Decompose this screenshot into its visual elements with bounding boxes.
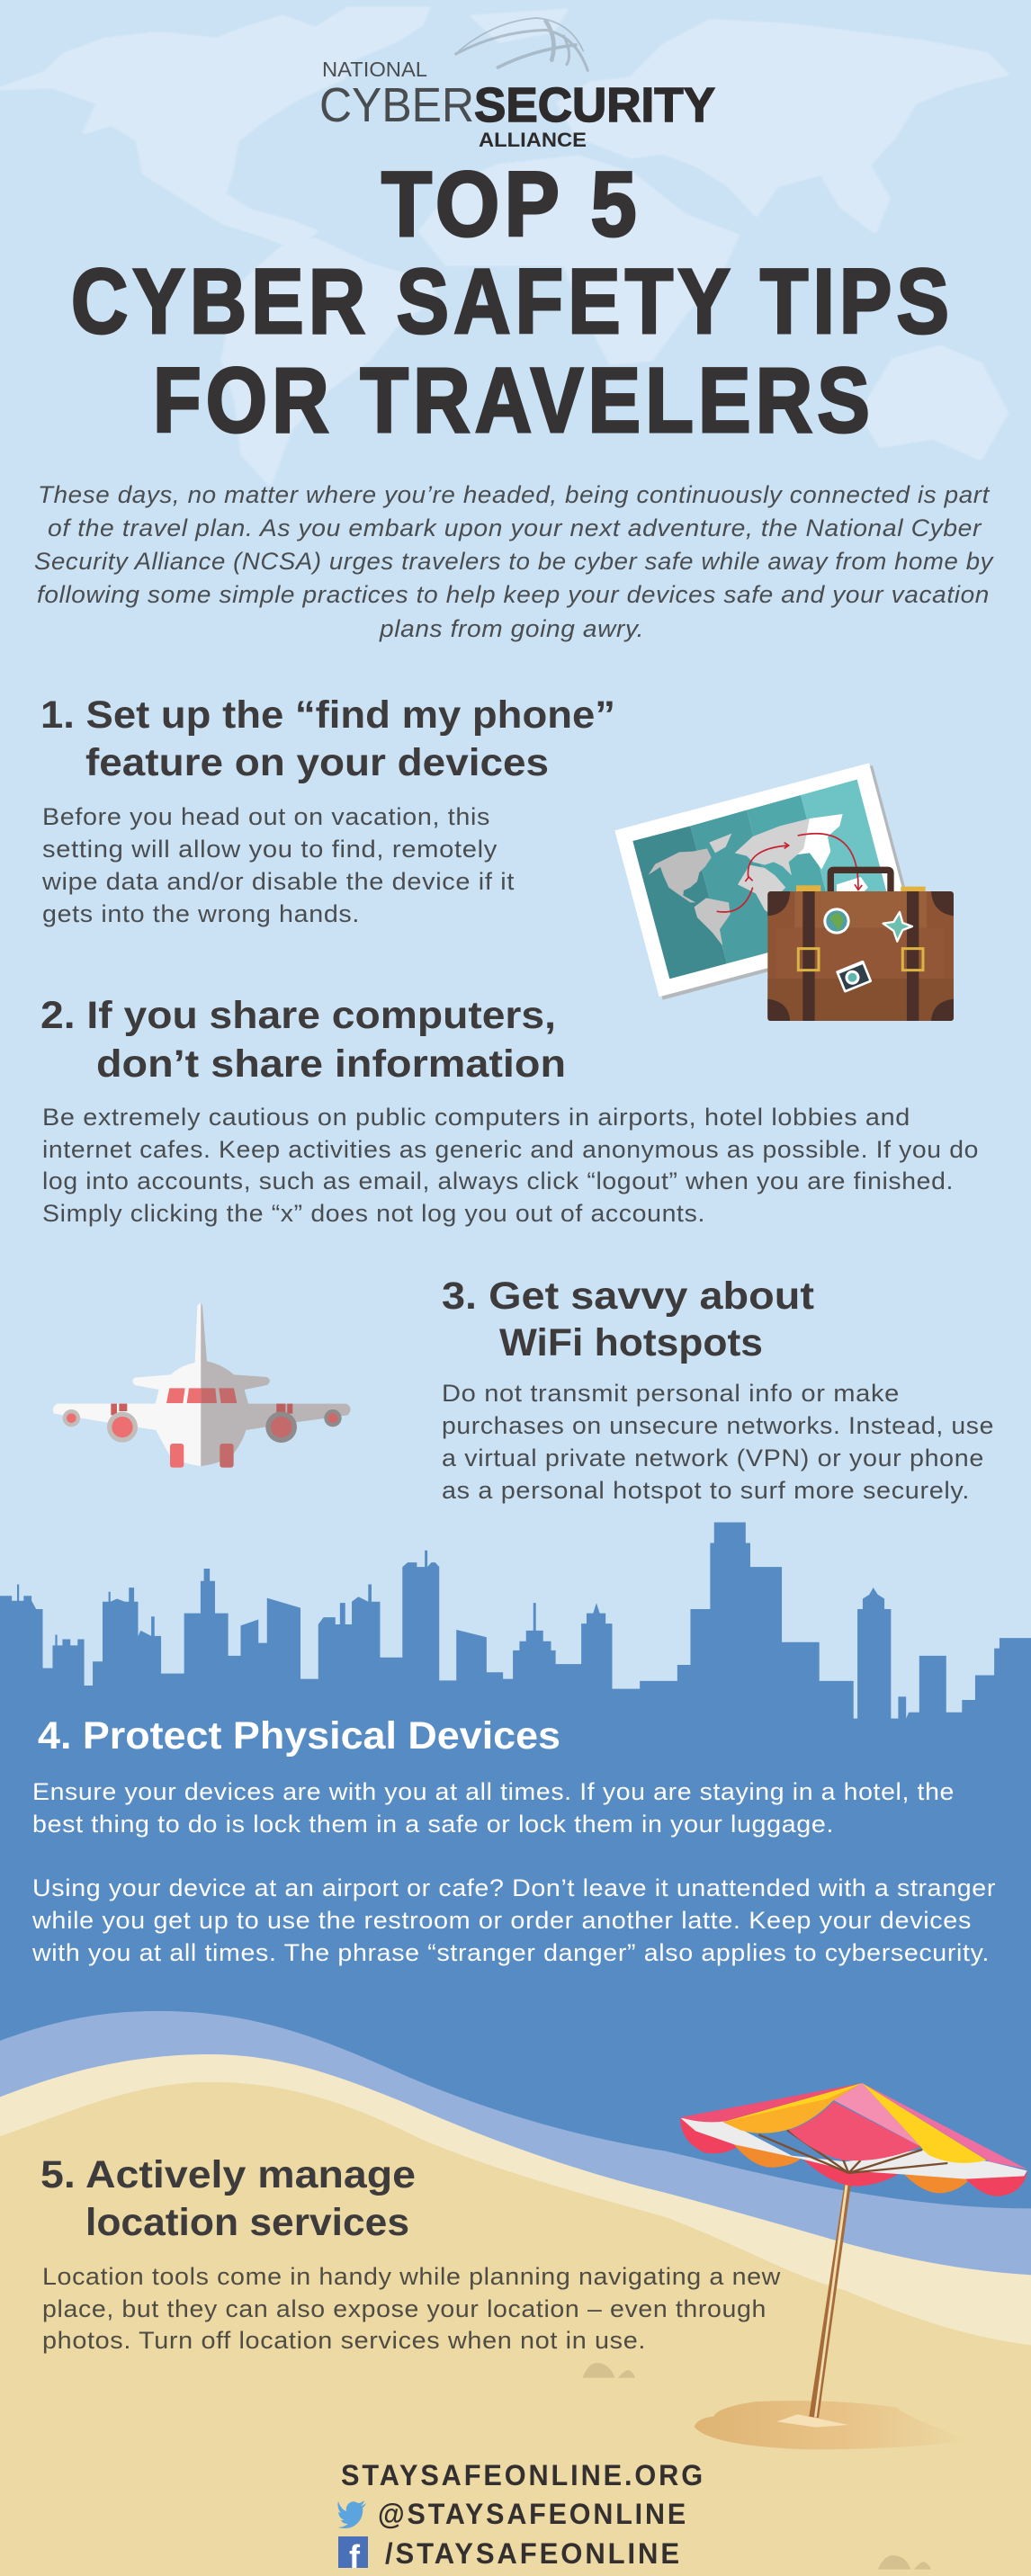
flight arrows (717, 834, 862, 912)
text: tip 2 (42, 1104, 979, 1227)
text: tip 4: Ensure your devices are with you at all times. If you are staying in a hotel, the (32, 1778, 955, 1805)
heading: tip 3: 3. Get savvy about (442, 1275, 814, 1318)
panel: tip 5 (40, 2153, 781, 2354)
logo: National Cyber Security Alliance: ALLIANCE (479, 129, 587, 151)
heading: tip 1: feature on your devices (85, 741, 549, 784)
canopy (680, 2083, 1027, 2196)
text: tip 4: while you get up to use the restroom or order another latte. Keep your devices (31, 1907, 972, 1934)
logo: National Cyber Security Alliance: SECURITY (474, 78, 715, 132)
heading: tip 1 (40, 693, 615, 784)
text: tip 2: Simply clicking the “x” does not log you out of accounts. (42, 1200, 705, 1227)
text: tip 3: purchases on unsecure networks. Instead, use (442, 1412, 994, 1439)
logo: National Cyber Security Alliance: CYBER (319, 78, 474, 132)
icon: beach umbrella (680, 2083, 1027, 2449)
text: tip 5: photos. Turn off location services when not in use. (42, 2327, 646, 2354)
intro paragraph: of the travel plan. As you embark upon your next adventure, the National Cyber (48, 514, 982, 541)
city skyline (0, 1523, 1031, 2375)
text: tip 1: wipe data and/or disable the device if it (41, 868, 515, 895)
text: tip 2: Be extremely cautious on public computers in airports, hotel lobbies and (42, 1104, 910, 1131)
panel: tip 1 (40, 693, 615, 927)
suitcase (767, 870, 954, 1021)
icon: facebook: f (349, 2538, 361, 2575)
text: tip 4: best thing to do is lock them in a safe or lock them in your luggage. (32, 1811, 834, 1838)
heading: tip 2: 2. If you share computers, (40, 994, 556, 1037)
text: tip 2: log into accounts, such as email, always click “logout” when you are finished. (42, 1167, 954, 1194)
text: tip 4: Using your device at an airport or cafe? Don’t leave it unattended with a stranger (32, 1874, 996, 1901)
icon: airplane (53, 1302, 351, 1468)
sand mound (695, 2401, 969, 2449)
title: TOP 5 (381, 153, 641, 255)
text: tip 3: Do not transmit personal info or make (442, 1380, 900, 1407)
title (71, 153, 954, 452)
text: tip 3: a virtual private network (VPN) or your phone (442, 1445, 984, 1471)
heading: tip 2 (40, 994, 566, 1086)
heading: tip 5 (40, 2153, 416, 2244)
text: tip 4 (31, 1778, 996, 1966)
sand rocks (583, 2363, 931, 2570)
heading: tip 3 (442, 1275, 814, 1364)
map (614, 763, 917, 1000)
text: tip 1: Before you head out on vacation, this (42, 803, 490, 830)
logo swoosh (456, 18, 587, 70)
text: tip 1 (41, 803, 515, 927)
footer links (337, 2459, 705, 2575)
text: tip 2: internet cafes. Keep activities as generic and anonymous as possible. If you do (42, 1136, 979, 1163)
pole (776, 2175, 852, 2428)
icon: facebook (338, 2536, 368, 2575)
intro paragraph: Security Alliance (NCSA) urges travelers to be cyber safe while away from home by (34, 548, 994, 575)
facebook handle: /STAYSAFEONLINE (385, 2537, 682, 2570)
text: tip 3 (442, 1380, 994, 1504)
logo: National Cyber Security Alliance: NATIONAL (322, 58, 427, 81)
website: STAYSAFEONLINE.ORG (341, 2459, 705, 2491)
heading: tip 2: don’t share information (96, 1042, 566, 1086)
heading: tip 3: WiFi hotspots (499, 1321, 763, 1364)
logo: National Cyber Security Alliance (319, 18, 715, 151)
panel: tip 4 (31, 1714, 996, 1966)
title: FOR TRAVELERS (153, 349, 874, 452)
text: tip 1: gets into the wrong hands. (42, 900, 360, 927)
heading: tip 1: 1. Set up the “find my phone” (40, 693, 615, 737)
beach waves (0, 2011, 1031, 2576)
icon: map and suitcase (614, 763, 954, 1021)
heading: tip 5: 5. Actively manage (40, 2153, 416, 2196)
background world map (0, 8, 1006, 483)
intro paragraph: following some simple practices to help keep your devices safe and your vacation (37, 581, 990, 608)
heading: tip 4: 4. Protect Physical Devices (38, 1714, 560, 1758)
text: tip 5 (42, 2263, 781, 2354)
text: tip 5: place, but they can also expose your location – even through (42, 2295, 767, 2322)
text: tip 4: with you at all times. The phrase “stranger danger” also applies to cybersecurity. (31, 1939, 990, 1966)
panel: tip 3 (442, 1275, 994, 1504)
panel: tip 2 (40, 994, 979, 1227)
intro paragraph (34, 481, 994, 642)
twitter handle: @STAYSAFEONLINE (378, 2498, 688, 2530)
text: tip 5: Location tools come in handy while planning navigating a new (42, 2263, 781, 2290)
text: tip 3: as a personal hotspot to surf more securely. (442, 1477, 970, 1504)
icon: twitter (337, 2500, 366, 2528)
intro paragraph: These days, no matter where you’re headed, being continuously connected is part (38, 481, 991, 508)
intro paragraph: plans from going awry. (379, 615, 644, 642)
heading: tip 5: location services (85, 2201, 409, 2244)
text: tip 1: setting will allow you to find, remotely (42, 836, 498, 863)
